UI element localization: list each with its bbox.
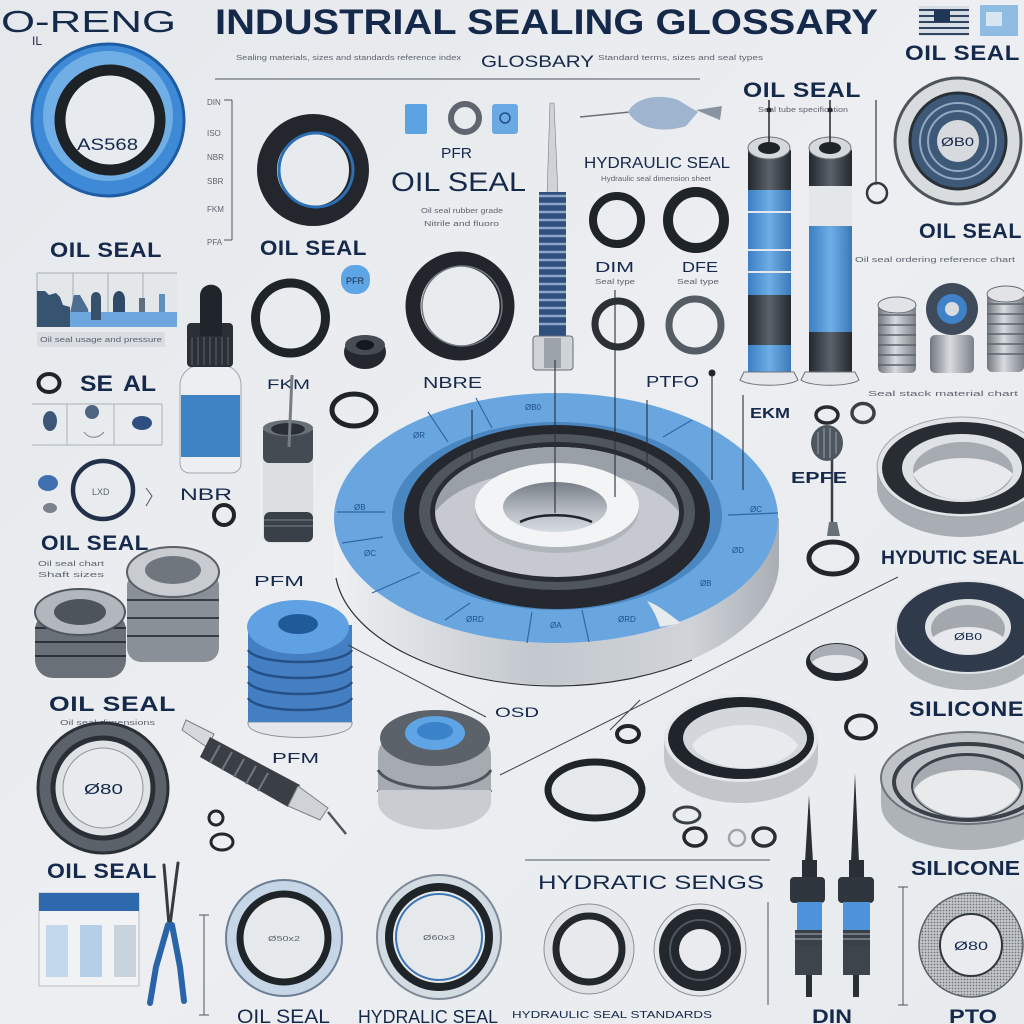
heading: hydraulic sensing: HYDRATIC SENGS xyxy=(538,873,764,894)
mesh disc xyxy=(919,893,1023,997)
labels: DIM and DFE: DIM xyxy=(595,259,634,276)
heading: fkm label: FKM xyxy=(267,376,310,392)
bearing seal top right xyxy=(895,78,1021,204)
central seal disk: ØB0 xyxy=(525,403,542,412)
labels: DIM and DFE: Seal type xyxy=(677,279,719,286)
small ring with pin xyxy=(867,100,887,203)
labels: DIM and DFE: DFE xyxy=(682,259,718,276)
size scale left xyxy=(207,98,232,247)
small rings right xyxy=(816,404,874,423)
small ring xyxy=(332,394,376,426)
central seal disk: ØC xyxy=(750,505,762,514)
size scale left: NBR xyxy=(207,153,224,162)
large blue o-ring with label AS568: AS568 xyxy=(77,135,138,154)
heading: oil seal with missing letter: AL xyxy=(123,371,156,396)
title: INDUSTRIAL SEALING GLOSSARY xyxy=(215,3,878,42)
heading: hydraulic seal right: HYDUTIC SEAL xyxy=(881,548,1024,569)
black oil seal ring xyxy=(267,124,359,216)
stacks right xyxy=(878,283,1024,373)
applicator tool top xyxy=(580,97,722,129)
labels: nbre ptfo xyxy=(423,374,699,392)
small ring beside heading xyxy=(38,374,60,392)
caption: Nitrile and fluoro xyxy=(424,221,499,228)
spring rod xyxy=(533,103,573,370)
caption lines under title: Sealing materials, sizes and standards reference index xyxy=(236,55,462,62)
diagonal leader lines xyxy=(348,577,898,775)
heading: silicone lower: SILICONE xyxy=(911,858,1020,880)
bottom ring 2 xyxy=(377,875,501,999)
pin with o-ring xyxy=(809,425,857,574)
central seal disk: ØRD xyxy=(466,615,484,624)
heading: pfr: PFR xyxy=(441,145,472,162)
large flat ring xyxy=(664,694,818,803)
bearing right upper xyxy=(877,417,1024,537)
heading: oil seal mid left: OIL SEAL xyxy=(41,532,149,555)
heading: oil seal top centre: OIL SEAL xyxy=(743,79,861,102)
label: osd: OSD xyxy=(495,704,539,720)
size scale left: ISO xyxy=(207,129,221,138)
small ring xyxy=(214,505,234,525)
bearing lower right xyxy=(881,732,1024,850)
heading: oil seal right: OIL SEAL xyxy=(919,220,1022,243)
caption: Seal tube specification xyxy=(758,107,848,114)
scale xyxy=(199,915,209,1015)
hydraulic cylinder tubes xyxy=(740,100,859,385)
heading: oil seal with missing letter xyxy=(80,371,156,396)
bottle xyxy=(180,285,241,473)
chart left: Oil seal usage and pressure xyxy=(40,337,162,344)
caption lines under title: Standard terms, sizes and seal types xyxy=(598,55,764,62)
probes xyxy=(790,773,874,997)
central seal disk: ØA xyxy=(550,621,562,630)
rings: DIM and DFE row xyxy=(593,192,724,351)
blobs xyxy=(38,475,58,513)
size scale left: PFA xyxy=(207,238,223,247)
labels: DIM and DFE xyxy=(595,259,719,286)
disk pointer lines xyxy=(472,290,743,513)
large seal lower left xyxy=(38,723,168,853)
label: ekm: EKM xyxy=(750,405,790,422)
caption: Hydraulic seal dimension sheet xyxy=(601,176,711,183)
seal tool xyxy=(182,720,346,834)
caption: Oil seal rubber grade xyxy=(421,208,503,215)
icon tiles xyxy=(32,404,162,445)
heading: o-ring: O-RENG xyxy=(1,4,176,39)
small cylinder seal xyxy=(344,335,386,369)
icon: flags top right xyxy=(919,5,1018,36)
small ring xyxy=(617,726,639,742)
caption: Oil seal chart xyxy=(38,561,104,568)
bottom ring 1 xyxy=(226,880,342,996)
bearing right middle xyxy=(895,580,1024,690)
central seal disk: ØB xyxy=(700,579,712,588)
heading: oil seal under ring: OIL SEAL xyxy=(260,237,367,260)
subtitle: GLOSBARY xyxy=(481,52,594,71)
caption: Seal stack material chart xyxy=(868,391,1018,398)
grey blue cylinder stack xyxy=(378,710,491,830)
heading: o-ring: IL xyxy=(32,34,42,48)
bottom double seals xyxy=(544,904,746,996)
large seal lower left: Ø80 xyxy=(84,781,123,798)
label: pfm lower: PFM xyxy=(272,750,319,767)
chart left xyxy=(37,273,177,347)
o-ring medium left xyxy=(256,283,326,353)
central seal disk: ØB xyxy=(354,503,366,512)
central seal disk: ØC xyxy=(364,549,376,558)
oval seal xyxy=(548,762,642,818)
heading: oil seal lower left: OIL SEAL xyxy=(47,860,157,883)
heading: hydraulic seal: HYDRAULIC SEAL xyxy=(584,155,730,172)
small ring xyxy=(846,716,876,738)
callout ticks xyxy=(146,488,152,506)
label: pfm: PFM xyxy=(254,573,304,590)
large blue o-ring with label AS568 xyxy=(32,44,184,196)
labels: nbre ptfo: NBRE xyxy=(423,375,482,392)
scale lines right xyxy=(768,887,908,1005)
central seal disk: ØRD xyxy=(618,615,636,624)
bottom labels: HYDRAULIC SEAL STANDARDS xyxy=(512,1010,712,1021)
chart tile xyxy=(39,893,139,986)
central seal disk: ØR xyxy=(413,431,425,440)
bearing seal top right: ØB0 xyxy=(941,135,974,149)
heading: oil seal top right: OIL SEAL xyxy=(905,42,1020,65)
caption: Oil seal ordering reference chart xyxy=(855,257,1015,264)
bearing right middle: ØB0 xyxy=(954,632,983,643)
mesh disc: Ø80 xyxy=(954,939,988,953)
pliers xyxy=(150,863,184,1003)
caption xyxy=(38,561,105,579)
size scale left: FKM xyxy=(207,205,224,214)
bottom labels xyxy=(237,1007,997,1024)
heading: silicone upper: SILICONE xyxy=(909,698,1024,721)
central seal disk: ØD xyxy=(732,546,744,555)
heading: oil seal lower: OIL SEAL xyxy=(49,693,176,716)
caption lines under title xyxy=(215,55,764,79)
blue tag xyxy=(341,265,370,294)
medium black ring xyxy=(413,259,507,353)
label: epfe: EPFE xyxy=(791,470,847,487)
caption: Oil seal dimensions xyxy=(60,720,156,727)
ring left middle xyxy=(73,461,133,519)
labels: nbre ptfo: PTFO xyxy=(646,374,699,391)
labels: DIM and DFE: Seal type xyxy=(595,279,635,286)
divider above hydraulic sensing xyxy=(525,859,770,861)
pin right xyxy=(708,370,716,376)
small rings lower left xyxy=(209,811,233,850)
blue ring stack xyxy=(247,600,352,738)
heading: o-ring xyxy=(1,4,176,48)
stacked rings left xyxy=(35,547,219,678)
size scale left: SBR xyxy=(207,177,224,186)
size scale left: DIN xyxy=(207,98,221,107)
caption: Shaft sizes xyxy=(38,572,105,579)
small icons: top centre xyxy=(405,104,518,134)
caption xyxy=(421,208,503,228)
central seal disk xyxy=(334,393,779,686)
ring left middle: LXD xyxy=(92,487,110,497)
heading: oil seal centre: OIL SEAL xyxy=(391,167,526,197)
heading: oil seal with missing letter: SE xyxy=(80,371,113,396)
heading: oil seal left: OIL SEAL xyxy=(50,239,162,262)
small rings lower centre xyxy=(674,807,775,846)
seal sample vial xyxy=(263,375,313,543)
bottom ring 1: Ø50x2 xyxy=(268,936,300,943)
small ring seal xyxy=(806,643,868,681)
blue tag: PFR xyxy=(346,276,365,286)
label: nbr: NBR xyxy=(180,485,232,504)
bottom ring 2: Ø60x3 xyxy=(423,935,455,942)
